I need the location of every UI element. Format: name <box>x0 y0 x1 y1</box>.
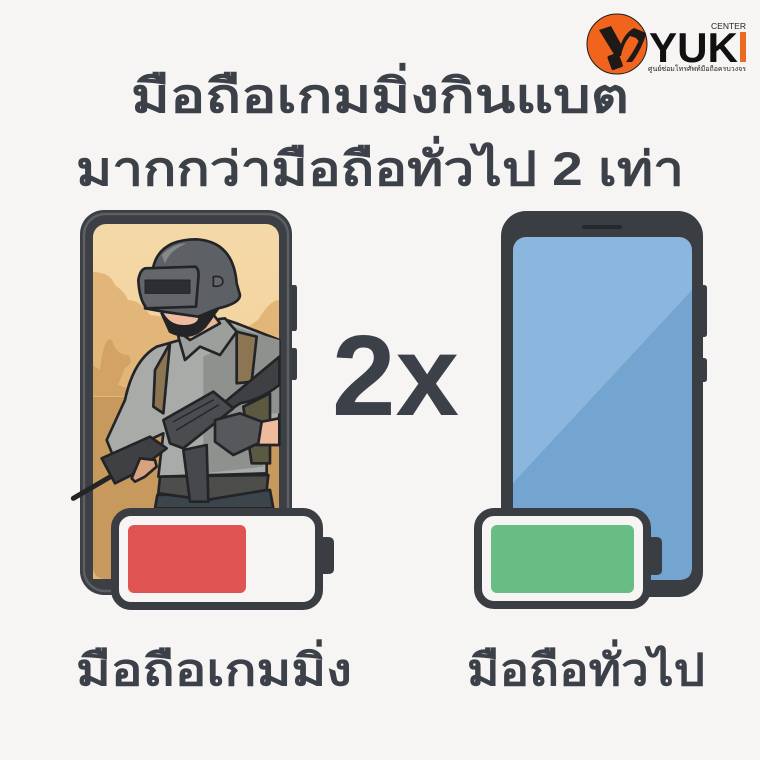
right glove <box>215 413 262 455</box>
speaker <box>582 225 622 229</box>
logo: center label: CENTER <box>711 22 746 31</box>
logo: wordmark: YUK <box>649 24 738 71</box>
label: regular phone: มือถือทั่วไป <box>467 639 705 695</box>
rifle barrel <box>73 475 113 498</box>
2x multiplier: 2x <box>332 313 459 440</box>
torso shirt <box>107 320 279 477</box>
battery: low red <box>115 512 334 606</box>
title: มือถือเกมมิ่งกินแบต <box>131 62 629 122</box>
title: มากกว่ามือถือทั่วไป 2 เท่า <box>76 135 684 195</box>
battery charge level <box>128 525 246 593</box>
phone body <box>80 210 292 595</box>
battery terminal <box>321 537 334 574</box>
helmet strap <box>213 276 223 286</box>
left hand <box>132 458 157 482</box>
battery charge level <box>491 525 634 593</box>
rifle magazine <box>183 445 208 502</box>
phone side buttons <box>292 285 297 380</box>
battery shell <box>115 512 319 606</box>
logo: tagline: ศูนย์ซ่อมโทรศัพท์มือถือครบวงจร <box>648 64 746 73</box>
phone side buttons <box>702 285 707 382</box>
logo: orange circle icon <box>587 14 647 74</box>
vest straps <box>153 332 257 413</box>
helmet visor <box>138 267 199 308</box>
right forearm <box>257 418 279 445</box>
soldier illustration <box>73 239 279 508</box>
rifle receiver <box>163 392 233 448</box>
logo: orange bar <box>740 32 746 62</box>
helmet <box>145 239 240 317</box>
battery shell <box>478 512 647 605</box>
label: gaming phone: มือถือเกมมิ่ง <box>76 639 352 695</box>
panel: gaming phone <box>73 210 334 606</box>
panel: regular phone <box>478 211 707 605</box>
phone screen <box>513 237 692 580</box>
battery: full green <box>478 512 662 605</box>
battery terminal <box>651 537 662 575</box>
collar and neck <box>178 318 237 360</box>
beard and face <box>162 308 218 336</box>
trousers <box>155 490 273 508</box>
title <box>76 62 684 195</box>
belt <box>158 475 268 500</box>
logo <box>587 14 746 74</box>
rifle stock <box>223 357 279 410</box>
phone body <box>501 211 703 597</box>
game screen background <box>93 224 279 579</box>
